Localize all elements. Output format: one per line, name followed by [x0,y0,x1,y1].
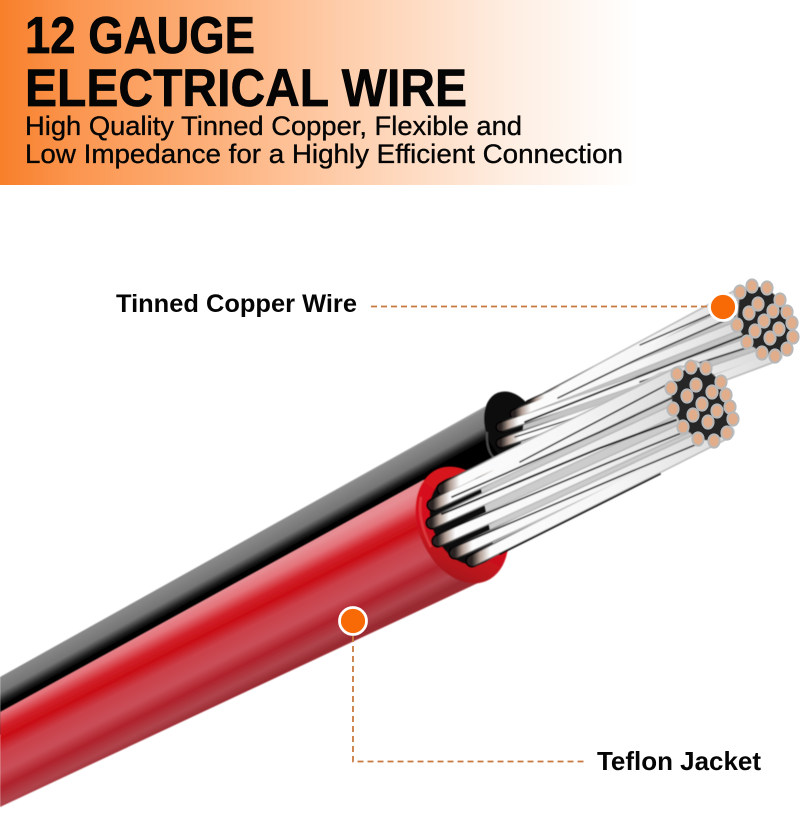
subtitle line one: High Quality Tinned Copper, Flexible and [25,111,522,141]
callout: tinned copper wire [116,290,736,320]
dashed leader line [371,306,710,308]
title line two: ELECTRICAL WIRE [25,59,467,118]
subtitle line two: Low Impedance for a Highly Efficient Connection [25,139,623,169]
title line one: 12 GAUGE [25,7,255,65]
lower conductor end: copper strands [665,360,739,448]
black cable jacket [0,383,550,735]
upper conductor end: copper strands [731,279,799,363]
dashed leader line [353,636,585,762]
upper conductor strands [501,291,777,452]
red cable jacket [0,452,526,807]
marker dot [710,294,736,320]
callout: teflon jacket [340,608,761,776]
lower conductor strands [432,365,730,561]
illustration: two-conductor cable [0,279,799,807]
label: teflon jacket: Teflon Jacket [597,746,761,776]
title [25,7,467,118]
label: tinned copper wire: Tinned Copper Wire [116,290,357,318]
subtitle [25,111,623,169]
marker dot [340,608,366,634]
header banner [0,0,640,185]
